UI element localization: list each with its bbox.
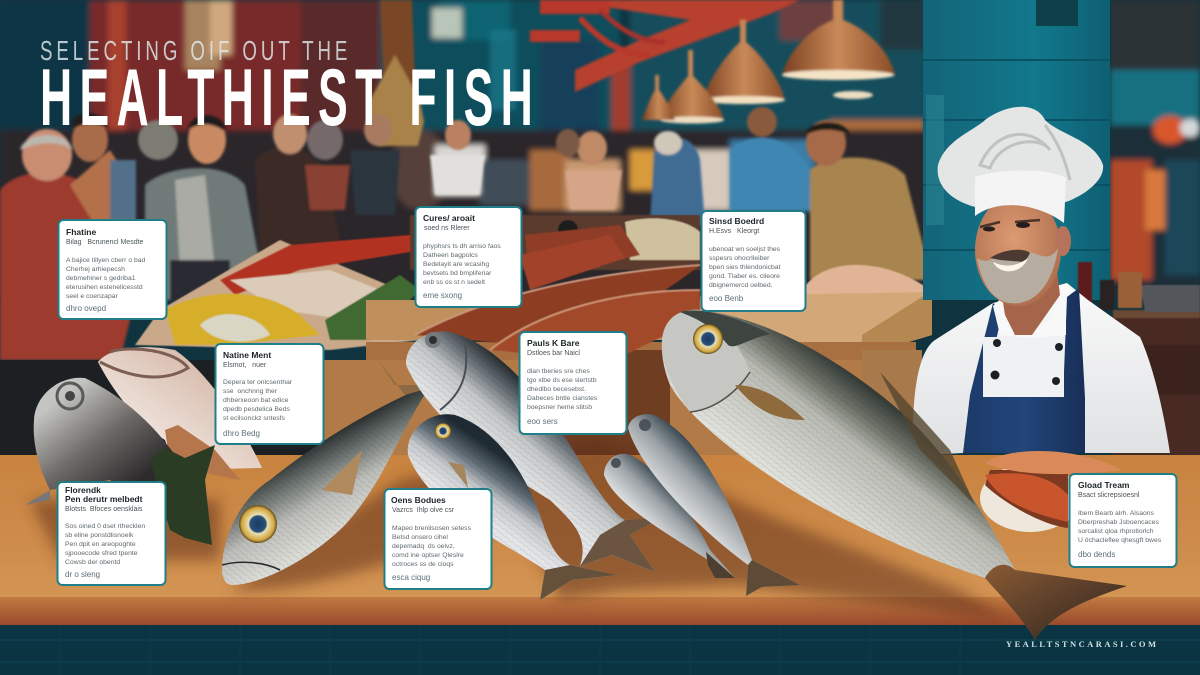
card: Florendk: Cowsb der obentd (65, 559, 120, 566)
card: Fhatine: dhro ovepd (66, 304, 106, 313)
fish: centre upper (406, 331, 660, 572)
card: Oens Bodues: octroces ss de cloqs (392, 561, 454, 568)
card: Natine Ment: Natine Ment (223, 350, 271, 360)
card: Natine Ment: dpedb pesdelica Beds (223, 406, 290, 413)
card: Florendk: dr o sleng (65, 570, 100, 579)
card: Fhatine: Cherhej arhiepecsh (66, 266, 125, 273)
fish: dark left fish (25, 378, 215, 545)
card: Pauls K Bare: Dabeces bntle cianstes (527, 395, 598, 402)
fish: centre lower (408, 414, 617, 600)
card: Oens Bodues (384, 489, 492, 589)
card: Fhatine (58, 220, 166, 319)
card: Gload Tream: Bsact slicrepsioesnl (1078, 492, 1140, 499)
card: Cures Aroait: Cures/ aroait (423, 213, 475, 223)
card: Fhatine: seel e coenzapar (66, 293, 119, 300)
counter (0, 455, 1200, 675)
card: Fhatine: debmehiner s gedriba1 (66, 275, 136, 282)
chef hat (938, 107, 1103, 207)
hanging basket lamp (375, 0, 415, 115)
card: Gload Tream: Ibem Bearb alrh. Alsaons (1078, 510, 1155, 517)
tail (985, 565, 1127, 640)
card: Sinsd Bodied (702, 211, 806, 311)
card: Fhatine: A bajice tillyen cberr o bad (66, 257, 146, 264)
card: Florendk: sb ellne ponstdlisnoelk (65, 532, 134, 539)
market background (0, 0, 1200, 460)
plate of cooked fish (980, 451, 1122, 532)
card: Natine Ment (216, 344, 324, 444)
fish: big right fish (662, 310, 1127, 640)
card: Pauls K Bare: boepsner heme stitsb (527, 404, 592, 411)
card: Pauls K Bare (520, 332, 626, 434)
chef coat (913, 283, 1170, 455)
card: Oens Bodues: Oens Bodues (391, 495, 446, 505)
card: Cures Aroait: Bedelayit are wcasihg (423, 261, 489, 268)
card: Sinsd Bodied: H.Esvs Kleorgt (709, 228, 759, 235)
card: Florendk: Pen dpit en areopoghte (65, 541, 136, 548)
card: Gload Tream: dbo dends (1078, 550, 1115, 559)
card: Pauls K Bare: tgo xlbe ds ese slertstb (527, 377, 597, 384)
card: Gload Tream: U ôchacleflee qhesgft bwes (1078, 537, 1162, 544)
card: Cures Aroait: phyphsrs ts dh arriso faos (423, 243, 501, 250)
card: Pauls K Bare: eoo sers (527, 417, 558, 426)
card: Cures Aroait: bevtsets bd bmpliferiar (423, 270, 492, 277)
card: Gload Tream: Dberpreshab Jsboencaces (1078, 519, 1159, 526)
title: HEALTHIEST FISH (40, 52, 533, 142)
card: Sinsd Bodied: dbignemercd oelbed. (709, 282, 773, 289)
card: Oens Bodues: Mapeo brenilsosen setess (392, 525, 472, 532)
card: Fhatine: Bilag Bcrunencl Mesdte (66, 239, 144, 246)
card: Pauls K Bare: dhedlbo becesebst. (527, 386, 586, 393)
card: Pauls K Bare: Dstloes bar Naicl (527, 350, 580, 357)
card: Oens Bodues: Vazrcs Ihlp olve csr (392, 507, 455, 514)
copper lamps (642, 0, 895, 124)
red structure (560, 0, 800, 92)
card: Oens Bodues: depemadq ds oelvz, (392, 543, 455, 550)
wooden crates (0, 292, 932, 460)
card: Gload Tream (1070, 474, 1176, 567)
card: Florendk: sjpooecode sfred tpente (65, 550, 138, 557)
footer url: YEALLTSTNCARASI.COM (1006, 639, 1156, 649)
beard (977, 248, 1058, 303)
card: Pauls K Bare: dlan tberies sre ches (527, 368, 590, 375)
distant crowd colours (390, 130, 450, 210)
neck (1001, 270, 1060, 335)
card: Gload Tream: Gload Tream (1078, 480, 1130, 490)
card: Cures Aroait (416, 207, 522, 307)
fish: front left large fish (222, 360, 440, 585)
card: Florendk: Blotsts Bfoces oensklais (65, 506, 143, 513)
card: Fhatine: Fhatine (66, 227, 96, 237)
card: Pauls K Bare: Pauls K Bare (527, 338, 580, 348)
card: Natine Ment: dhberxeoon bat edice (223, 397, 289, 404)
card: Sinsd Bodied: bpen sies thlendonicbat (709, 264, 781, 271)
card: Natine Ment: dhro Bedg (223, 429, 260, 438)
card: Cures Aroait: soed ns Rlerer (424, 225, 470, 232)
people (0, 107, 932, 360)
chef (913, 107, 1170, 455)
card: Florendk (58, 482, 166, 585)
red fish on crates (415, 235, 700, 361)
card: Oens Bodues: comd ine optser Qleslre (392, 552, 464, 559)
card: Fhatine: eterusihen estenellcesstd (66, 284, 143, 291)
card: Sinsd Bodied: gond. Tlaber es. clieore (709, 273, 780, 280)
pillar (923, 0, 1110, 300)
card: Florendk: Pen derutr melbedt (65, 494, 143, 504)
card: Cures Aroait: enb ss os st n sedelt (423, 279, 485, 286)
card: Natine Ment: sse onchnng ther (223, 388, 278, 395)
card: Sinsd Bodied: Sinsd Boedrd (709, 216, 764, 226)
card: Florendk: Florendk (65, 485, 101, 495)
head (662, 310, 750, 412)
face (975, 194, 1061, 306)
card: Florendk: Sos oined 0 dset rthecklen (65, 523, 145, 530)
card: Natine Ment: Depera ter onlcsenthar (223, 379, 293, 386)
right side counter and bottles (1078, 262, 1200, 455)
fish: pink fillet head (98, 347, 262, 495)
title: SELECTING OIF OUT THE (40, 35, 347, 66)
card: Sinsd Bodied: sspesrs ohocrlleiber (709, 255, 770, 262)
fish: small pair (604, 414, 800, 596)
card: Natine Ment: st ecilsonckz sntesfs (223, 415, 286, 422)
fish shadows on counter (30, 440, 1010, 620)
card: Gload Tream: sorcalist qloa rhprotlorlch (1078, 528, 1154, 535)
card: Cures Aroait: Datheen bagpolcs (423, 252, 478, 259)
card: Oens Bodues: Betsd onsero cihel (392, 534, 448, 541)
stall goods (135, 215, 930, 350)
card: Cures Aroait: eme sxong (423, 291, 462, 300)
card: Natine Ment: Elsmot, nuer (223, 362, 267, 369)
apron (963, 288, 1085, 453)
card: Sinsd Bodied: eoo Benb (709, 294, 744, 303)
card: Oens Bodues: esca ciqug (392, 573, 430, 582)
card: Sinsd Bodied: ubenoat wn soeljst thes (709, 246, 781, 253)
